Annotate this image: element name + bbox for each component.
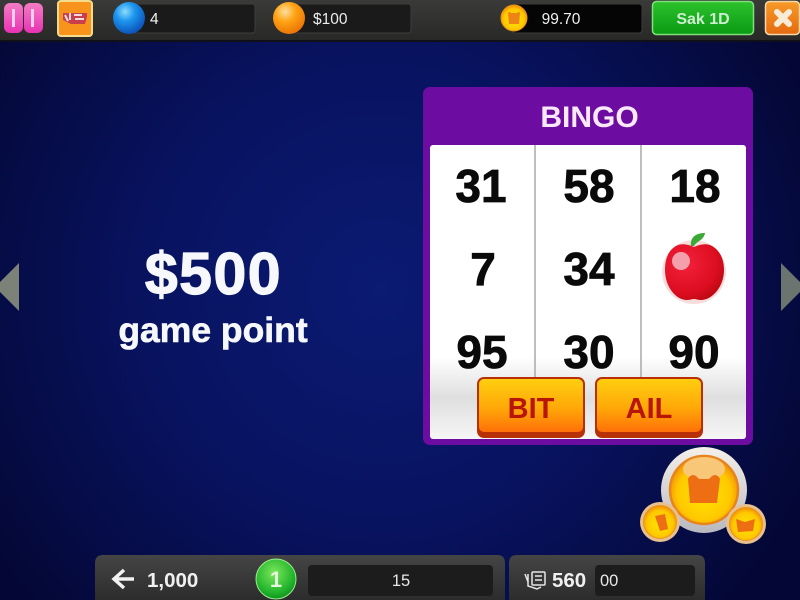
arrow: next (781, 263, 800, 311)
numbers: 18 (669, 160, 721, 212)
bottom bar: left panel (95, 555, 505, 600)
arrow: previous (0, 263, 19, 311)
bottom bar: right panel (509, 555, 705, 600)
numbers: 90 (668, 326, 720, 378)
panel: bingo card (423, 87, 753, 445)
icon: back arrow (114, 570, 134, 588)
icon: orange ball (273, 2, 305, 34)
button: AIL (595, 377, 703, 438)
numbers: 31 (455, 160, 507, 212)
coins counter (273, 2, 411, 34)
green action button: Sak 1D (676, 11, 730, 28)
heading: BINGO (540, 101, 639, 134)
icon: small power-up left (640, 502, 680, 542)
card grid (430, 145, 746, 439)
icon: green number badge (256, 559, 296, 599)
numbers: 58 (563, 160, 615, 212)
icon: green number badge: 1 (270, 567, 282, 592)
value field (595, 565, 695, 596)
bottom bar: right panel: 560 (552, 569, 586, 592)
icon: large power-up (661, 447, 747, 533)
coins counter: $100 (313, 11, 348, 28)
numbers: 30 (563, 326, 615, 378)
value field: 00 (600, 572, 618, 590)
icon: apple (662, 233, 726, 304)
icon: gold coin (501, 5, 527, 31)
numbers: 7 (470, 243, 496, 295)
button: BIT: BIT (508, 393, 555, 425)
value field (308, 565, 493, 596)
icon: small power-up right (726, 504, 766, 544)
lives counter (113, 2, 255, 34)
balance counter: 99.70 (542, 11, 581, 28)
numbers (455, 160, 721, 378)
prize text: game point (118, 310, 308, 350)
icon cluster: power-up buttons (640, 447, 766, 544)
icon: orange game badge (58, 1, 92, 36)
bottom bar: left panel: 1,000 (147, 569, 198, 592)
close button (766, 2, 800, 34)
icon: blue ball (113, 2, 145, 34)
button: BIT (477, 377, 585, 438)
prize text: $500 (145, 241, 282, 307)
button: AIL: AIL (626, 393, 672, 425)
top status bar (0, 0, 800, 42)
value field: 15 (392, 572, 410, 590)
prize text (118, 241, 308, 350)
balance counter (501, 4, 642, 33)
lives counter: 4 (150, 11, 159, 28)
numbers: 34 (563, 243, 615, 295)
icon: pause button (4, 3, 43, 33)
numbers: 95 (456, 326, 508, 378)
icon: ticket stack (525, 572, 545, 589)
green action button (652, 2, 754, 34)
